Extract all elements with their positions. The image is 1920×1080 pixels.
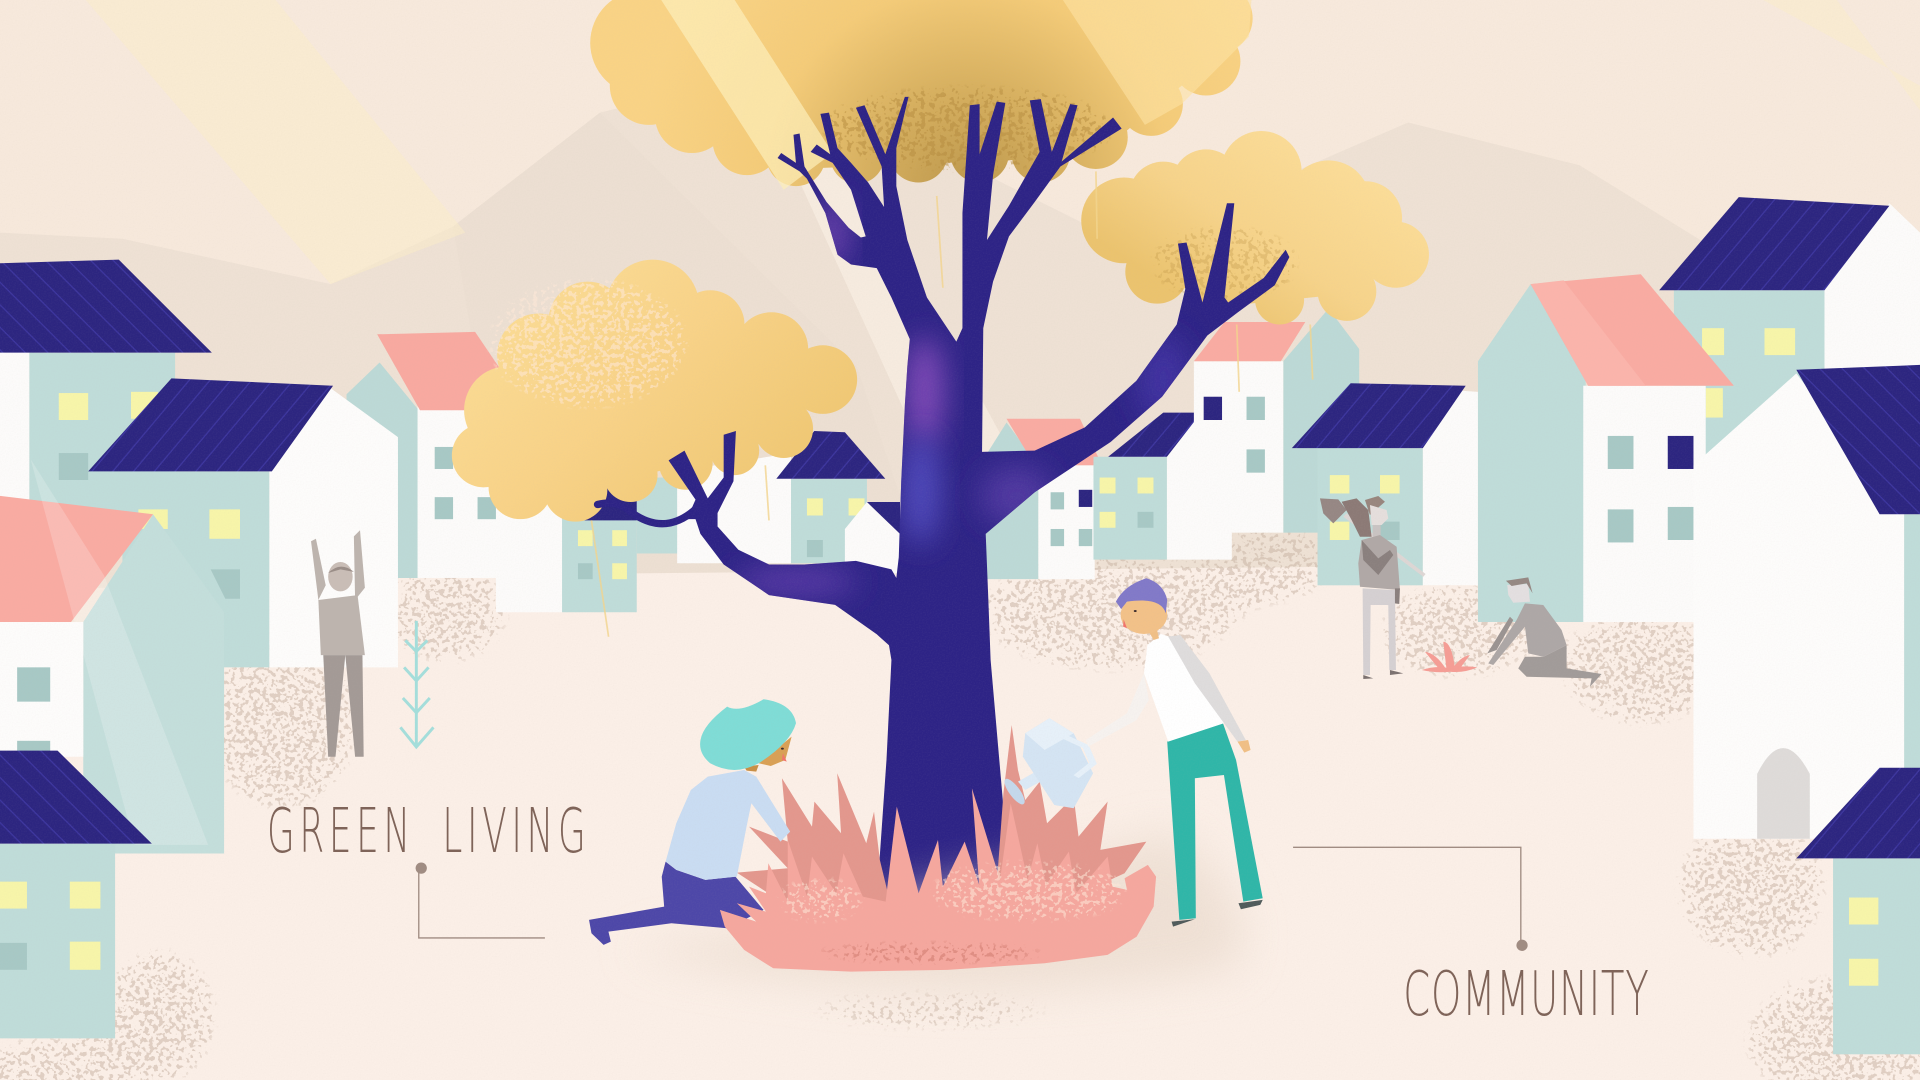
label: green living: GREEN LIVING [267, 795, 590, 867]
house: bottom left [0, 751, 152, 1038]
person kneeling at bush [589, 699, 796, 945]
door [1757, 748, 1810, 839]
bush highlight speckle [765, 860, 1139, 924]
glow left branch [735, 567, 857, 596]
ground speckle patches [0, 520, 1920, 1080]
house: tall white with pink roof [1194, 309, 1359, 533]
house: navy roof mid right [1292, 383, 1478, 585]
watering can [1001, 718, 1093, 808]
small teal plant [400, 621, 433, 747]
ground shadow under bush [624, 833, 1242, 991]
house: pink roof right of trunk [986, 419, 1102, 579]
sun rays behind [86, 0, 1920, 576]
house: near trunk left [677, 431, 900, 573]
curved twig of lower-left branch [598, 503, 700, 524]
dripping yellow threads [591, 171, 1313, 637]
left canopy light speckle [484, 276, 692, 410]
sun ray over left front house [31, 459, 208, 845]
leader line: green living [416, 863, 545, 938]
gardener with shovel [1320, 496, 1426, 679]
house: top left navy roof [0, 260, 212, 524]
leader line: community [1293, 847, 1528, 951]
kneeling person planting [1487, 577, 1602, 687]
tree trunk and branches [668, 96, 1290, 894]
house: back left pink roof [347, 332, 577, 578]
label: community: COMMUNITY [1403, 960, 1650, 1031]
glow right trunk [980, 465, 1053, 527]
house: second left navy roof [88, 378, 398, 667]
foliage: left canopy [452, 260, 857, 522]
bush back spikes [737, 725, 1146, 910]
foliage: right canopy [1081, 131, 1429, 324]
house: bottom right [1796, 768, 1920, 1054]
glow right branch [1136, 336, 1190, 424]
top canopy gold speckle [814, 84, 1120, 173]
house: big white front right with door [1693, 365, 1920, 839]
house: back right navy roof [1659, 197, 1920, 456]
house: navy roof right of trunk [1093, 413, 1232, 560]
background hills [0, 73, 1714, 588]
purple glow upper trunk [905, 337, 944, 447]
house: left front pink roof [0, 496, 224, 853]
ground [0, 563, 1920, 1080]
person watering (standing) [1086, 578, 1263, 927]
sun rays over top canopy [661, 0, 1251, 190]
foliage: top canopy [590, 0, 1253, 186]
house: behind foliage left [496, 478, 680, 612]
glow upper-left limb [818, 198, 847, 267]
house: right with pink roof [1478, 274, 1734, 622]
right canopy gold speckle [1145, 224, 1304, 302]
bush front [720, 788, 1156, 972]
bush dark speckle [790, 940, 1071, 965]
blue glow mid trunk [901, 435, 940, 545]
person with raised arms [311, 530, 365, 757]
small pink sprout [1422, 642, 1477, 672]
